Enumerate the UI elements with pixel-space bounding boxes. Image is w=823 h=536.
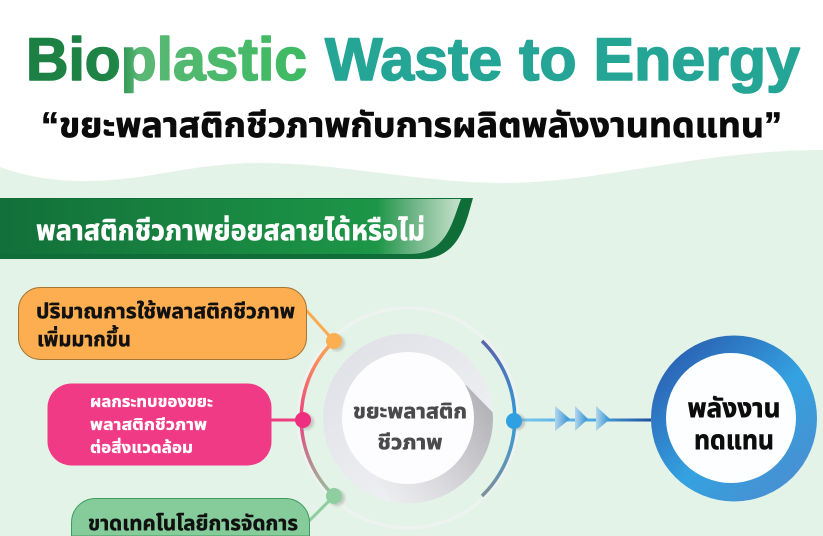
centre circle: ขยะพลาสติก <box>353 401 467 423</box>
section banner <box>0 198 473 259</box>
centre circle <box>323 334 500 510</box>
arrow line <box>514 418 651 422</box>
title <box>26 26 801 93</box>
centre circle: ชีวภาพ <box>378 432 442 454</box>
title: Waste to Energy <box>325 26 801 93</box>
energy circle <box>651 336 817 502</box>
pink box <box>48 384 272 466</box>
title: Bioplastic <box>26 26 307 93</box>
left arc <box>301 341 334 496</box>
pink box: ต่อสิ่งแวดล้อม <box>90 437 193 457</box>
orange box: เพิ่มมากขึ้น <box>37 325 131 351</box>
green box <box>72 498 310 536</box>
right arc <box>482 341 515 496</box>
energy circle: ทดแทน <box>694 425 774 455</box>
banner heading: พลาสติกชีวภาพย่อยสลายได้หรือไม่ <box>36 215 425 246</box>
arrow heads <box>555 406 610 431</box>
orange box: ปริมาณการใช้พลาสติกชีวภาพ <box>36 301 295 323</box>
pink box: ผลกระทบของขยะ <box>90 394 213 411</box>
pink box: พลาสติกชีวภาพ <box>90 417 207 434</box>
orange box <box>18 288 306 360</box>
green box: ขาดเทคโนโลยีการจัดการ <box>88 513 298 535</box>
outer faint ring <box>298 308 518 528</box>
connector lines <box>270 310 334 522</box>
subtitle: “ขยะพลาสติกชีวภาพกับการผลิตพลังงานทดแทน” <box>41 106 782 145</box>
energy circle: พลังงาน <box>688 393 780 423</box>
node dots <box>295 333 525 506</box>
background wave <box>0 150 823 536</box>
